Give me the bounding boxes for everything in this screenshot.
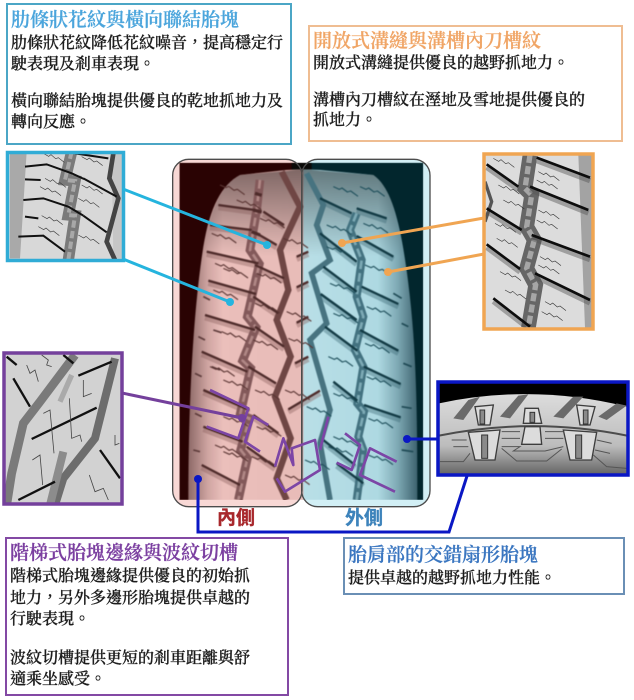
- inner grooves: [193, 172, 320, 500]
- inset: open slots close-up: [484, 154, 593, 330]
- sipes: [210, 185, 313, 485]
- text block: ribbed pattern description: 橫向聯結胎塊提供優良的乾地抓地力及: [11, 93, 283, 110]
- panel: inner side highlight: [173, 159, 302, 507]
- heading: ribbed pattern: 肋條狀花紋與橫向聯結胎塊: [11, 10, 239, 31]
- text block: stepped block description: 地力，另外多邊形胎塊提供卓越的: [10, 590, 250, 607]
- text block: ribbed pattern description: 駛表現及剎車表現。: [11, 56, 155, 73]
- tire illustration: [173, 159, 430, 507]
- text block: open slots description: 開放式溝縫提供優良的越野抓地力。: [313, 55, 569, 72]
- inset: stepped block edge close-up: [4, 353, 122, 505]
- tire photo: [179, 163, 423, 500]
- panel: outer side highlight: [302, 159, 430, 507]
- text block: ribbed pattern description: [11, 34, 283, 131]
- label: inner side: 內側: [217, 507, 255, 529]
- heading: stepped block edges: 階梯式胎塊邊緣與波紋切槽: [10, 543, 238, 564]
- arrow: open slot leader: [338, 218, 484, 247]
- arrow: shoulder leader: [403, 435, 438, 443]
- text block: open slots description: 溝槽內刀槽紋在溼地及雪地提供優良的: [313, 92, 585, 109]
- inset: ribbed pattern close-up: [8, 152, 130, 260]
- arrow: shoulder leader to text: [194, 475, 467, 532]
- text block: stepped block description: [10, 567, 250, 688]
- text block: shoulder description: 提供卓越的越野抓地力性能。: [348, 570, 556, 587]
- inset: shoulder scallop close-up: [438, 382, 628, 475]
- panel: open slots and sipes: [308, 25, 623, 142]
- arrow: sipe leader: [384, 254, 484, 276]
- outer grooves: [307, 173, 413, 500]
- text block: stepped block description: 階梯式胎塊邊緣提供優良的初始抓: [10, 568, 250, 585]
- arrow: ribbed pattern leader 1: [123, 189, 271, 249]
- panel: shoulder scalloped blocks: [343, 537, 625, 595]
- inner and outer outline: [173, 159, 430, 507]
- text block: ribbed pattern description: 肋條狀花紋降低花紋噪音，提高穩定行: [11, 35, 283, 52]
- text block: stepped block description: 波紋切槽提供更短的剎車距離與舒: [10, 650, 250, 667]
- label: outer side: 外側: [345, 507, 383, 529]
- text block: stepped block description: 適乘坐感受。: [10, 671, 106, 688]
- panel: stepped block edges and zigzag grooves: [5, 537, 289, 696]
- heading: open slots: 開放式溝縫與溝槽內刀槽紋: [313, 31, 541, 52]
- text block: ribbed pattern description: 轉向反應。: [11, 114, 91, 131]
- arrow: ribbed pattern leader 2: [123, 259, 234, 306]
- text block: open slots description: 抓地力。: [313, 112, 377, 129]
- text block: open slots description: [313, 54, 585, 129]
- panel: ribbed pattern and lateral blocks: [6, 3, 292, 145]
- heading: shoulder blocks: 胎肩部的交錯扇形胎塊: [348, 545, 538, 566]
- purple stepped block edge outlines: [207, 390, 397, 492]
- arrow: stepped block leader: [122, 393, 246, 422]
- text block: stepped block description: 行駛表現。: [10, 611, 90, 628]
